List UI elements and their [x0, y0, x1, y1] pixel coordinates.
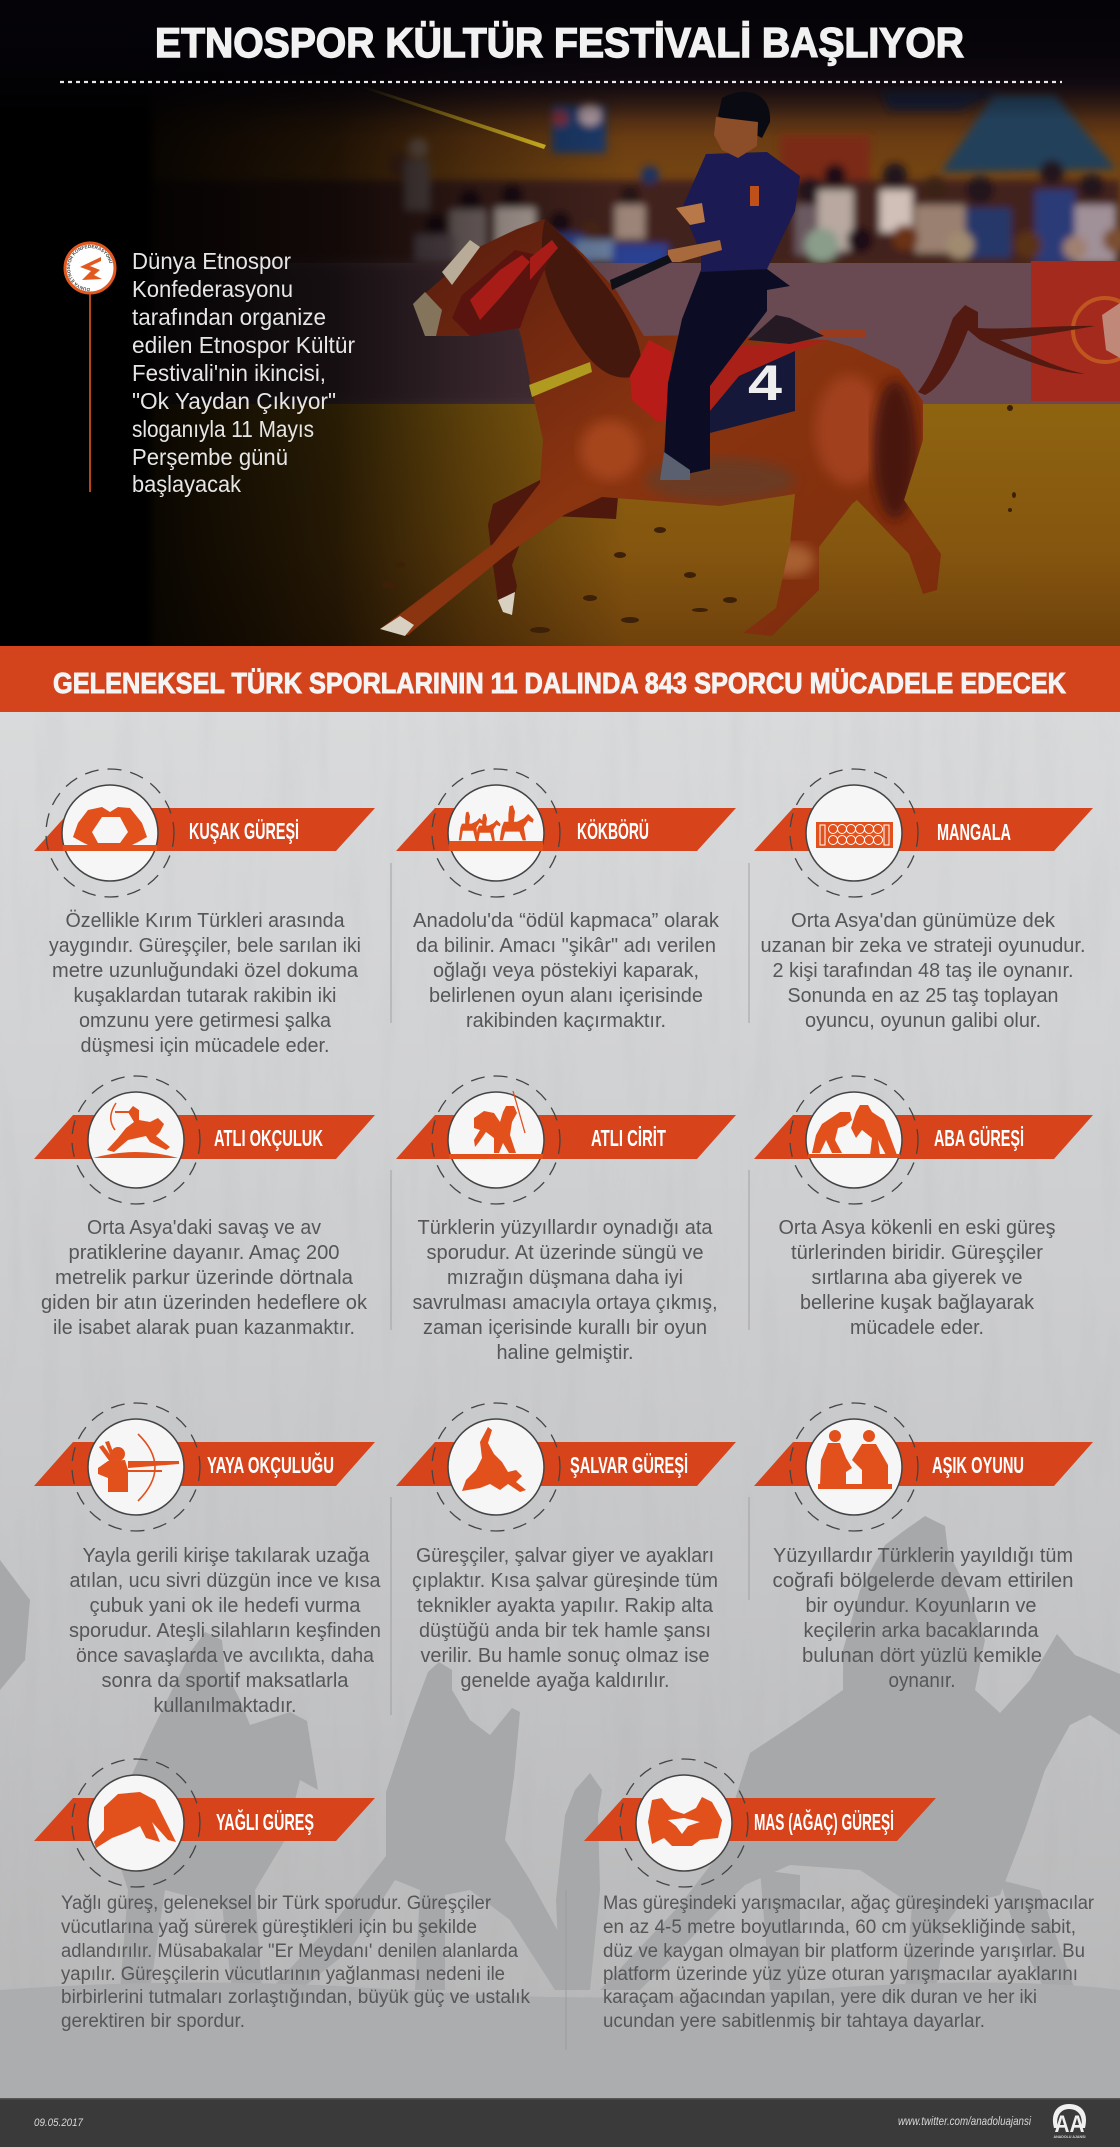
- intro text: başlayacak: [132, 471, 241, 497]
- text: Kökbörü: [413, 910, 720, 1032]
- text: Aba Güreşi: bellerine kuşak bağlayarak: [800, 1292, 1035, 1314]
- text: Yaya Okçuluğu: [69, 1545, 381, 1717]
- panel: Yaya Okçuluğu: [34, 1403, 375, 1531]
- icon: Anadolu Agency logo: AA: [1054, 2111, 1084, 2138]
- text: Mas (Ağaç) Güreşi: karaçam ağacından yapılan, yere dik duran ve her iki: [603, 1987, 1037, 2008]
- text: Atlı Cirit: mızrağın düşmana daha iyi: [447, 1267, 683, 1289]
- ribbon: [754, 1442, 1093, 1486]
- text: Mangala: oyuncu, oyunun galibi olur.: [805, 1010, 1041, 1032]
- horse: far foreleg: [488, 480, 618, 615]
- panel: Şalvar Güreşi: [396, 1403, 736, 1531]
- text: Aşık Oyunu: [772, 1545, 1074, 1692]
- text: Yağlı Güreş: vücutlarına yağ sürerek güreştikleri için bu şekilde: [61, 1917, 477, 1938]
- text: Mangala: Sonunda en az 25 taş toplayan: [788, 985, 1058, 1007]
- icon: mangala board: [816, 822, 893, 848]
- panel: grey sports background: [0, 712, 1120, 2098]
- panel: Atlı Okçuluk: [34, 1076, 375, 1204]
- text: Aşık Oyunu: bir oyundur. Koyunların ve: [806, 1595, 1036, 1617]
- silhouettes of horse riders: [0, 1516, 1120, 2098]
- intro text: Konfederasyonu: [132, 276, 293, 302]
- text: Aba Güreşi: Orta Asya kökenli en eski güreş: [778, 1217, 1056, 1239]
- panel: Atlı Cirit: ATLI CİRİT: [591, 1125, 666, 1151]
- text: Şalvar Güreşi: genelde ayağa kaldırılır.: [460, 1670, 670, 1692]
- text: Yaya Okçuluğu: sporudur. Ateşli silahların keşfinden: [69, 1620, 381, 1642]
- ribbon: [34, 808, 375, 851]
- panel: Mas (Ağaç) Güreşi: [584, 1759, 936, 1887]
- text: Mangala: uzanan bir zeka ve strateji oyunudur.: [760, 935, 1086, 957]
- text: Kuşak Güreşi: kuşaklardan tutarak rakibin iki: [74, 985, 336, 1007]
- text: Aşık Oyunu: bulunan dört yüzlü kemikle: [802, 1645, 1042, 1667]
- text: Mas (Ağaç) Güreşi: ucundan yere sabitlenmiş bir tahtaya dayarlar.: [603, 2011, 985, 2032]
- text: Atlı Okçuluk: ile isabet alarak puan kazanmaktır.: [53, 1317, 355, 1339]
- text: Yaya Okçuluğu: sonra da sportif maksatlarla: [102, 1670, 349, 1692]
- text: Yaya Okçuluğu: kullanılmaktadır.: [154, 1695, 296, 1717]
- text: Atlı Okçuluk: Orta Asya'daki savaş ve av: [87, 1217, 321, 1239]
- text: Kökbörü: da bilinir. Amacı "şikâr" adı verilen: [416, 935, 716, 957]
- text: Mangala: 2 kişi tarafından 48 taş ile oynanır.: [772, 960, 1074, 982]
- intro text: Dünya Etnospor: [132, 248, 291, 274]
- icon: Dünya Etnospor logo: [64, 242, 116, 492]
- text: Mas (Ağaç) Güreşi: [603, 1893, 1095, 2032]
- icon: knuckle-bone players: [818, 1430, 892, 1489]
- text: Atlı Cirit: [412, 1217, 718, 1364]
- text: Kuşak Güreşi: [49, 910, 361, 1057]
- panel: Kuşak Güreşi: [34, 769, 375, 897]
- text: Şalvar Güreşi: [412, 1545, 718, 1692]
- text: Aşık Oyunu: keçilerin arka bacaklarında: [804, 1620, 1039, 1642]
- icon: mas wrestlers: [648, 1797, 722, 1846]
- text: Kökbörü: rakibinden kaçırmaktır.: [466, 1010, 666, 1032]
- text: Aba Güreşi: türlerinden biridir. Güreşçiler: [791, 1242, 1043, 1264]
- text: Yaya Okçuluğu: önce savaşlarda ve avcılıkta, daha: [76, 1645, 375, 1667]
- ribbon: [396, 1115, 736, 1159]
- text: Aşık Oyunu: oynanır.: [888, 1670, 956, 1692]
- text: Mas (Ağaç) Güreşi: platform üzerinde yüz yüze oturan yarışmacılar ayaklarını: [603, 1964, 1078, 1985]
- text: Mas (Ağaç) Güreşi: Mas güreşindeki yarışmacılar, ağaç güreşindeki yarışmacılar: [603, 1893, 1095, 1914]
- text: Şalvar Güreşi: verilir. Bu hamle sonuç olmaz ise: [420, 1645, 710, 1667]
- intro text: edilen Etnospor Kültür: [132, 332, 355, 358]
- panel: Şalvar Güreşi: ŞALVAR GÜREŞİ: [570, 1452, 688, 1478]
- horse shading: [580, 375, 917, 576]
- text: Kökbörü: oğlağı veya pöstekiyi kaparak,: [433, 960, 699, 982]
- ribbon: [754, 1115, 1093, 1159]
- panel: Yağlı Güreş: [34, 1759, 375, 1887]
- text: Atlı Okçuluk: pratiklerine dayanır. Amaç 200: [68, 1242, 340, 1264]
- footer: [0, 2098, 1120, 2147]
- twitter link: www.twitter.com/anadoluajansi: [898, 2114, 1031, 2128]
- text: Atlı Okçuluk: giden bir atın üzerinden hedeflere ok: [41, 1292, 368, 1314]
- text: Aşık Oyunu: coğrafi bölgelerde devam ettirilen: [772, 1570, 1074, 1592]
- text: Yağlı Güreş: birbirlerini tutmaları zorlaştığından, büyük güç ve ustalık: [61, 1987, 530, 2008]
- icon: aba wrestlers: [808, 1105, 900, 1158]
- panel: Atlı Cirit: [396, 1076, 736, 1204]
- text: Yağlı Güreş: adlandırılır. Müsabakalar "Er Meydanı' denilen alanlarda: [61, 1941, 518, 1962]
- text: Aba Güreşi: [778, 1217, 1056, 1339]
- panel: Mangala: MANGALA: [937, 819, 1011, 845]
- text: Kuşak Güreşi: Özellikle Kırım Türkleri arasında: [66, 910, 345, 932]
- panel: Kökbörü: [396, 769, 736, 897]
- tail: [918, 305, 1095, 395]
- icon: mounted archer: [93, 1103, 178, 1158]
- icon: javelin rider: [449, 1091, 543, 1159]
- text: Kuşak Güreşi: düşmesi için mücadele eder.: [80, 1035, 330, 1057]
- intro text: Festivali'nin ikincisi,: [132, 360, 326, 386]
- ribbon: [34, 1798, 375, 1841]
- ribbon: [34, 1442, 375, 1486]
- rider: [610, 92, 800, 480]
- text: Mangala: Orta Asya'dan günümüze dek: [791, 910, 1056, 932]
- panel: hero photo: [0, 0, 1120, 646]
- photo backdrop: crowd, wall, ground: [0, 0, 1120, 646]
- horse: [380, 219, 941, 636]
- icon: oil wrestlers: [94, 1792, 176, 1848]
- text: Yağlı Güreş: gerektiren bir spordur.: [61, 2011, 245, 2032]
- column dividers: [391, 863, 749, 2050]
- icon: standing archer: [98, 1434, 179, 1501]
- text: Kuşak Güreşi: omzunu yere getirmesi şalka: [79, 1010, 332, 1032]
- icon: belt wrestlers: [63, 807, 157, 851]
- text: Kuşak Güreşi: yaygındır. Güreşçiler, bele sarılan iki: [49, 935, 361, 957]
- icon: horsemen: [449, 805, 543, 851]
- panel: Mas (Ağaç) Güreşi: MAS (AĞAÇ) GÜREŞİ: [754, 1808, 894, 1835]
- heading band: [0, 646, 1120, 712]
- text: Yağlı Güreş: [61, 1893, 530, 2032]
- saddle cloth with number: 4: [748, 355, 782, 411]
- panel: Aşık Oyunu: [754, 1403, 1093, 1531]
- ribbon: [396, 1442, 736, 1486]
- intro text: "Ok Yaydan Çıkıyor": [132, 388, 336, 414]
- ribbon: [34, 1115, 375, 1159]
- panel: Kökbörü: KÖKBÖRÜ: [577, 818, 649, 844]
- text: Yağlı Güreş: Yağlı güreş, geleneksel bir Türk sporudur. Güreşçiler: [61, 1893, 492, 1914]
- left and top dark fade: [0, 0, 1120, 646]
- text: Atlı Okçuluk: [41, 1217, 368, 1339]
- panel: Aba Güreşi: [754, 1076, 1093, 1204]
- icon: Dünya Etnospor logo: DÜNYA ETNOSPOR KONFEDERASYONU: [66, 244, 112, 292]
- title: ETNOSPOR KÜLTÜR FESTİVALİ BAŞLIYOR: [155, 19, 964, 66]
- ribbon: [396, 808, 736, 851]
- panel: Yağlı Güreş: YAĞLI GÜREŞ: [216, 1808, 314, 1835]
- text: Kuşak Güreşi: metre uzunluğundaki özel dokuma: [52, 960, 359, 982]
- ribbon: [584, 1798, 936, 1841]
- text: Yaya Okçuluğu: çubuk yani ok ile hedefi vurma: [90, 1595, 361, 1617]
- text: Yaya Okçuluğu: Yayla gerili kirişe takılarak uzağa: [82, 1545, 370, 1567]
- intro text: sloganıyla 11 Mayıs: [132, 416, 314, 442]
- icon: Anadolu Agency logo: ANADOLU AJANSI: [1054, 2134, 1086, 2139]
- text: Atlı Okçuluk: metrelik parkur üzerinde dörtnala: [55, 1267, 354, 1289]
- text: Şalvar Güreşi: düştüğü anda bir tek hamle şansı: [419, 1620, 711, 1642]
- text: Mangala: [760, 910, 1086, 1032]
- icon: Anadolu Agency logo: [1053, 2104, 1086, 2139]
- panel: Atlı Okçuluk: ATLI OKÇULUK: [214, 1125, 323, 1151]
- text: Atlı Cirit: savrulması amacıyla ortaya çıkmış,: [412, 1292, 718, 1314]
- text: Şalvar Güreşi: teknikler ayakta yapılır. Rakip alta: [417, 1595, 714, 1617]
- text: Aşık Oyunu: Yüzyıllardır Türklerin yayıldığı tüm: [773, 1545, 1073, 1567]
- text: Yağlı Güreş: yapılır. Güreşçilerin vücutlarının yağlanması nedeni ile: [61, 1964, 505, 1985]
- panel: Kuşak Güreşi: KUŞAK GÜREŞİ: [189, 818, 299, 844]
- text: Kökbörü: belirlenen oyun alanı içerisinde: [429, 985, 703, 1007]
- panel: Yaya Okçuluğu: YAYA OKÇULUĞU: [207, 1451, 334, 1478]
- panel: Aba Güreşi: ABA GÜREŞİ: [934, 1125, 1024, 1151]
- text: Mas (Ağaç) Güreşi: düz ve kaygan olmayan bir platform üzerinde yarışırlar. Bu: [603, 1941, 1085, 1962]
- date: 09.05.2017: [34, 2117, 84, 2129]
- saddle cloth with number: [630, 315, 828, 433]
- icon: shalwar wrestlers: [462, 1427, 526, 1492]
- text: Atlı Cirit: zaman içerisinde kurallı bir oyun: [423, 1317, 707, 1339]
- ground specks: [382, 405, 1016, 633]
- panel: Aşık Oyunu: AŞIK OYUNU: [932, 1452, 1024, 1478]
- panel: Mangala: [754, 769, 1093, 897]
- intro text: [132, 248, 355, 497]
- text: Şalvar Güreşi: Güreşçiler, şalvar giyer ve ayakları: [416, 1545, 714, 1567]
- text: Mas (Ağaç) Güreşi: en az 4-5 metre boyutlarında, 60 cm yüksekliğinde sabit,: [603, 1917, 1076, 1938]
- intro text: Perşembe günü: [132, 444, 288, 470]
- intro text: tarafından organize: [132, 304, 326, 330]
- spear: [362, 86, 546, 149]
- text: Şalvar Güreşi: çıplaktır. Kısa şalvar güreşinde tüm: [412, 1570, 718, 1592]
- text: Aba Güreşi: mücadele eder.: [850, 1317, 984, 1339]
- text: Atlı Cirit: sporudur. At üzerinde süngü ve: [426, 1242, 704, 1264]
- text: Aba Güreşi: sırtlarına aba giyerek ve: [812, 1267, 1022, 1289]
- text: Yaya Okçuluğu: atılan, ucu sivri düzgün ince ve kısa: [70, 1570, 381, 1592]
- text: Kökbörü: Anadolu'da “ödül kapmaca” olarak: [413, 910, 720, 932]
- text: Atlı Cirit: haline gelmiştir.: [496, 1342, 634, 1364]
- ribbon: [754, 808, 1093, 851]
- text: Atlı Cirit: Türklerin yüzyıllardır oynadığı ata: [418, 1217, 713, 1239]
